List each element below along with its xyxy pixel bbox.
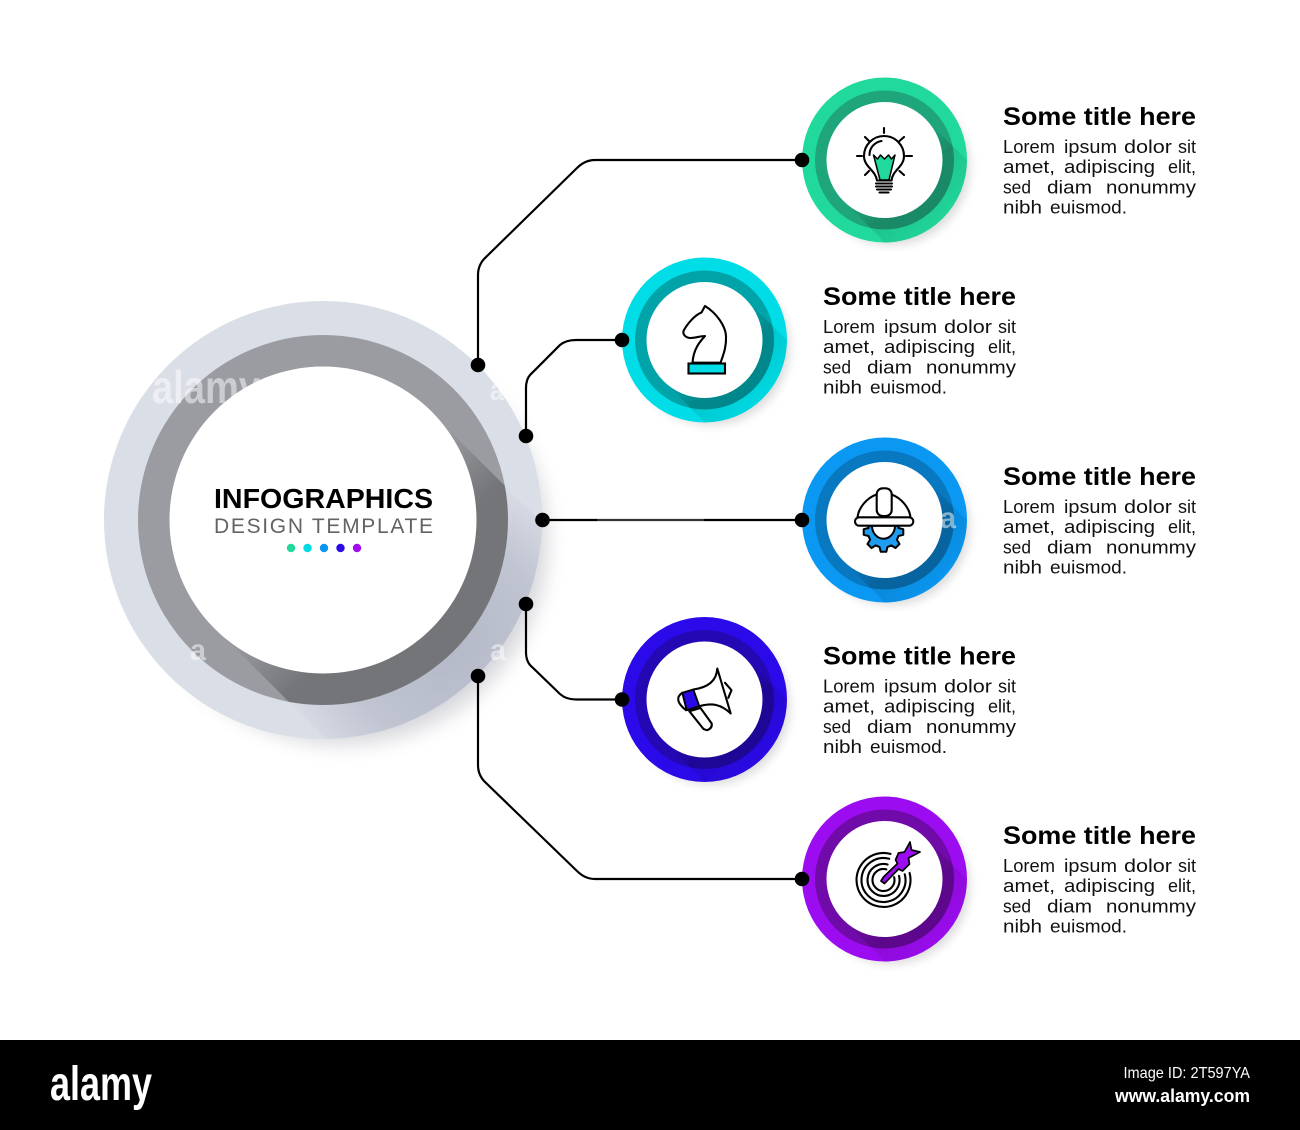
node 4 text: Some title here <box>823 642 1016 670</box>
colour dots <box>287 544 361 552</box>
node 5 text: euismod. <box>1050 916 1127 936</box>
central heading: INFOGRAPHICS <box>214 483 433 514</box>
node 4 text <box>823 642 1016 757</box>
node 2 text: euismod. <box>870 378 947 398</box>
node 5 text: amet, <box>1003 876 1055 896</box>
icon: chess knight <box>683 306 726 374</box>
node 5 text: sit <box>1178 856 1196 876</box>
node 3 text: ipsum <box>1064 497 1117 517</box>
connector 4 <box>519 597 629 707</box>
node 1 text: Lorem <box>1003 137 1055 157</box>
node 1 text: elit, <box>1168 157 1196 177</box>
node 5 text: Some title here <box>1003 822 1196 850</box>
node 2 text <box>823 283 1016 398</box>
node 3 text: adipiscing <box>1064 517 1155 537</box>
node 2 text: dolor <box>944 317 992 337</box>
node 1 text: nibh <box>1003 198 1042 218</box>
node 2 text: ipsum <box>884 317 937 337</box>
watermarks: a <box>940 502 956 535</box>
node 3: blue <box>802 438 972 608</box>
connector 3 <box>535 513 809 527</box>
connector 5 <box>471 669 809 886</box>
node 1 text: sit <box>1178 137 1196 157</box>
node 5 text: diam <box>1047 896 1092 916</box>
watermarks: a <box>490 374 504 407</box>
node 1 text: euismod. <box>1050 198 1127 218</box>
node 1 text: amet, <box>1003 157 1055 177</box>
node 4 text: adipiscing <box>884 696 975 716</box>
connector 2 <box>519 333 629 443</box>
icon: light bulb <box>857 128 912 192</box>
node 1 text: ipsum <box>1064 137 1117 157</box>
node 4 text: elit, <box>988 696 1016 716</box>
node 4 text: sed <box>823 717 851 737</box>
node 4 text: nibh <box>823 737 862 757</box>
node 2 text: nibh <box>823 378 862 398</box>
node 2 text: adipiscing <box>884 337 975 357</box>
footer url: www.alamy.com <box>1114 1085 1250 1106</box>
node 4 text: sit <box>998 676 1016 696</box>
node 3 text: elit, <box>1168 517 1196 537</box>
node 2 text: sed <box>823 358 851 378</box>
node 3 text: euismod. <box>1050 558 1127 578</box>
node 5 text: Lorem <box>1003 856 1055 876</box>
node 5 text <box>1003 822 1196 936</box>
node 5 text: adipiscing <box>1064 876 1155 896</box>
footer bar <box>0 1040 1300 1130</box>
node 5 text: nonummy <box>1106 896 1196 916</box>
node 2 text: elit, <box>988 337 1016 357</box>
node 2 text: amet, <box>823 337 875 357</box>
node 1 text: dolor <box>1124 137 1172 157</box>
footer image id: Image ID: 2T597YA <box>1124 1065 1250 1082</box>
central heading <box>214 483 433 538</box>
node 2: cyan <box>622 258 792 428</box>
node 3 text: nonummy <box>1106 538 1196 558</box>
node 2 text: Some title here <box>823 283 1016 311</box>
node 1 text: nonummy <box>1106 178 1196 198</box>
node 3 text: nibh <box>1003 558 1042 578</box>
node 1: green <box>802 78 972 248</box>
icon: megaphone <box>678 668 732 730</box>
central heading: DESIGN TEMPLATE <box>214 515 433 538</box>
footer logo: alamy <box>50 1058 152 1111</box>
central circle <box>104 301 555 752</box>
node 3 text: Lorem <box>1003 497 1055 517</box>
node 4 text: diam <box>867 717 912 737</box>
node 4 text: ipsum <box>884 676 937 696</box>
node 4 text: euismod. <box>870 737 947 757</box>
node 3 text: sit <box>1178 497 1196 517</box>
node 5 text: sed <box>1003 896 1031 916</box>
node 5: purple <box>802 796 972 967</box>
node 4 text: Lorem <box>823 676 875 696</box>
connector 1 <box>471 153 809 372</box>
node 2 text: sit <box>998 317 1016 337</box>
node 1 text: Some title here <box>1003 103 1196 131</box>
node 3 text: amet, <box>1003 517 1055 537</box>
node 4 text: nonummy <box>926 717 1016 737</box>
node 1 text: sed <box>1003 178 1031 198</box>
node 3 text: diam <box>1047 538 1092 558</box>
node 2 text: diam <box>867 358 912 378</box>
node 2 text: Lorem <box>823 317 875 337</box>
node 3 text: Some title here <box>1003 463 1196 491</box>
node 5 text: elit, <box>1168 876 1196 896</box>
node 5 text: ipsum <box>1064 856 1117 876</box>
watermarks: alamy <box>152 361 260 413</box>
node 1 text: adipiscing <box>1064 157 1155 177</box>
watermarks: a <box>190 634 206 667</box>
node 4: indigo <box>622 617 792 788</box>
node 5 text: nibh <box>1003 916 1042 936</box>
node 2 text: nonummy <box>926 358 1016 378</box>
watermarks: a <box>490 634 506 667</box>
node 4 text: dolor <box>944 676 992 696</box>
icon: target and arrow <box>857 842 920 907</box>
node 3 text <box>1003 463 1196 578</box>
node 3 text: sed <box>1003 538 1031 558</box>
node 5 text: dolor <box>1124 856 1172 876</box>
node 1 text <box>1003 103 1196 218</box>
node 1 text: diam <box>1047 178 1092 198</box>
watermarks <box>152 361 956 667</box>
node 3 text: dolor <box>1124 497 1172 517</box>
icon: helmet and gear <box>855 488 913 552</box>
node 4 text: amet, <box>823 696 875 716</box>
